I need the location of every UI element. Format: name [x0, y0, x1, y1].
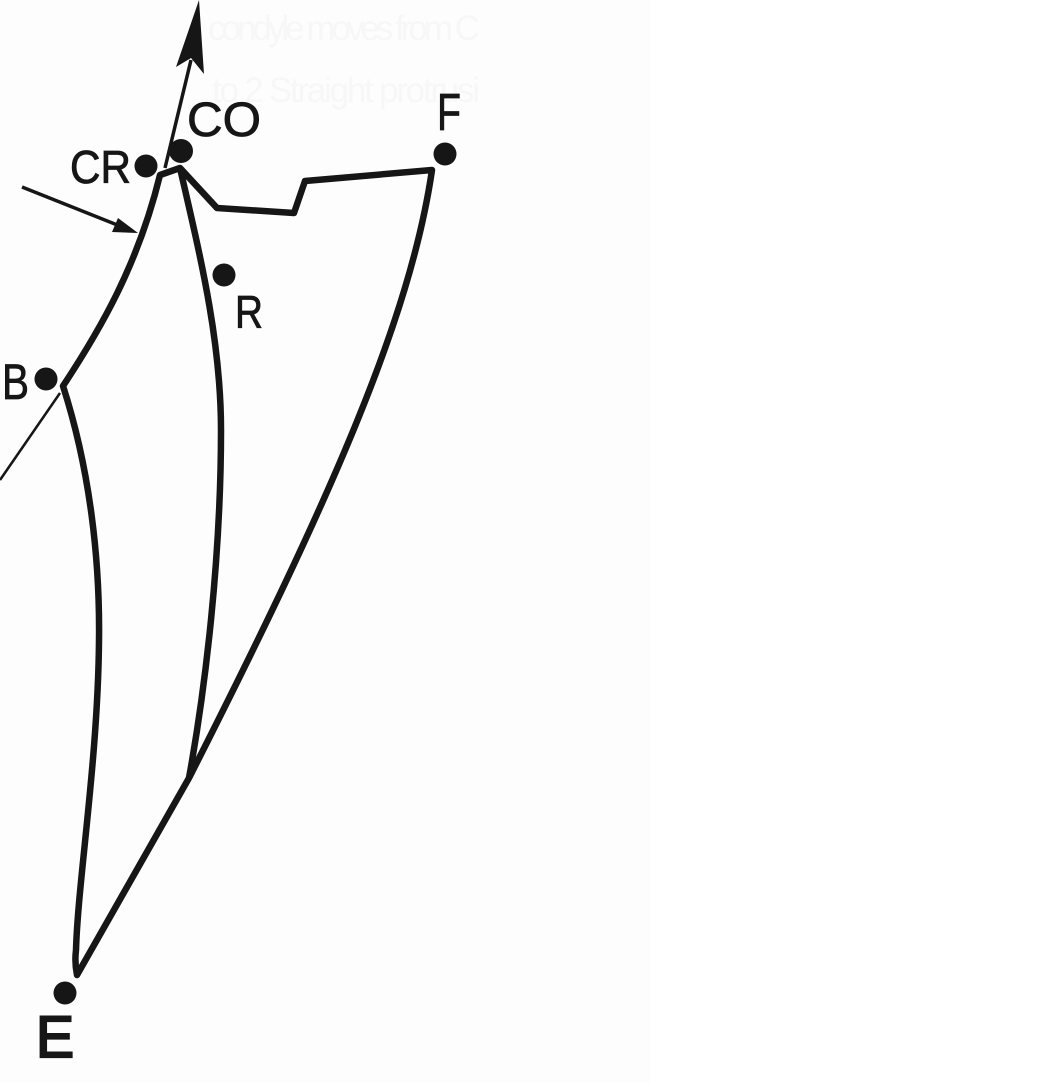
point F: F — [437, 84, 461, 142]
point R — [212, 264, 263, 338]
faint show-through text from reverse of the page: to 2 Straight protrusi — [212, 71, 480, 110]
point CO — [169, 94, 261, 163]
point B — [2, 354, 58, 410]
faint show-through text from reverse of the page: condyle moves from C — [208, 9, 480, 48]
point E: E — [36, 1005, 74, 1070]
inner closing path — [180, 168, 221, 778]
line extending below point B — [0, 393, 60, 480]
point CR: CR — [70, 141, 131, 193]
envelope outline — [63, 168, 432, 975]
point R: R — [235, 286, 263, 338]
point CO: CO — [187, 94, 261, 147]
faint show-through text from reverse of the page — [208, 9, 480, 110]
point F — [434, 84, 461, 166]
point B: B — [2, 354, 29, 410]
arrow: upward protrusive path — [165, 0, 204, 168]
arrow: pointer to curved path — [22, 187, 138, 233]
